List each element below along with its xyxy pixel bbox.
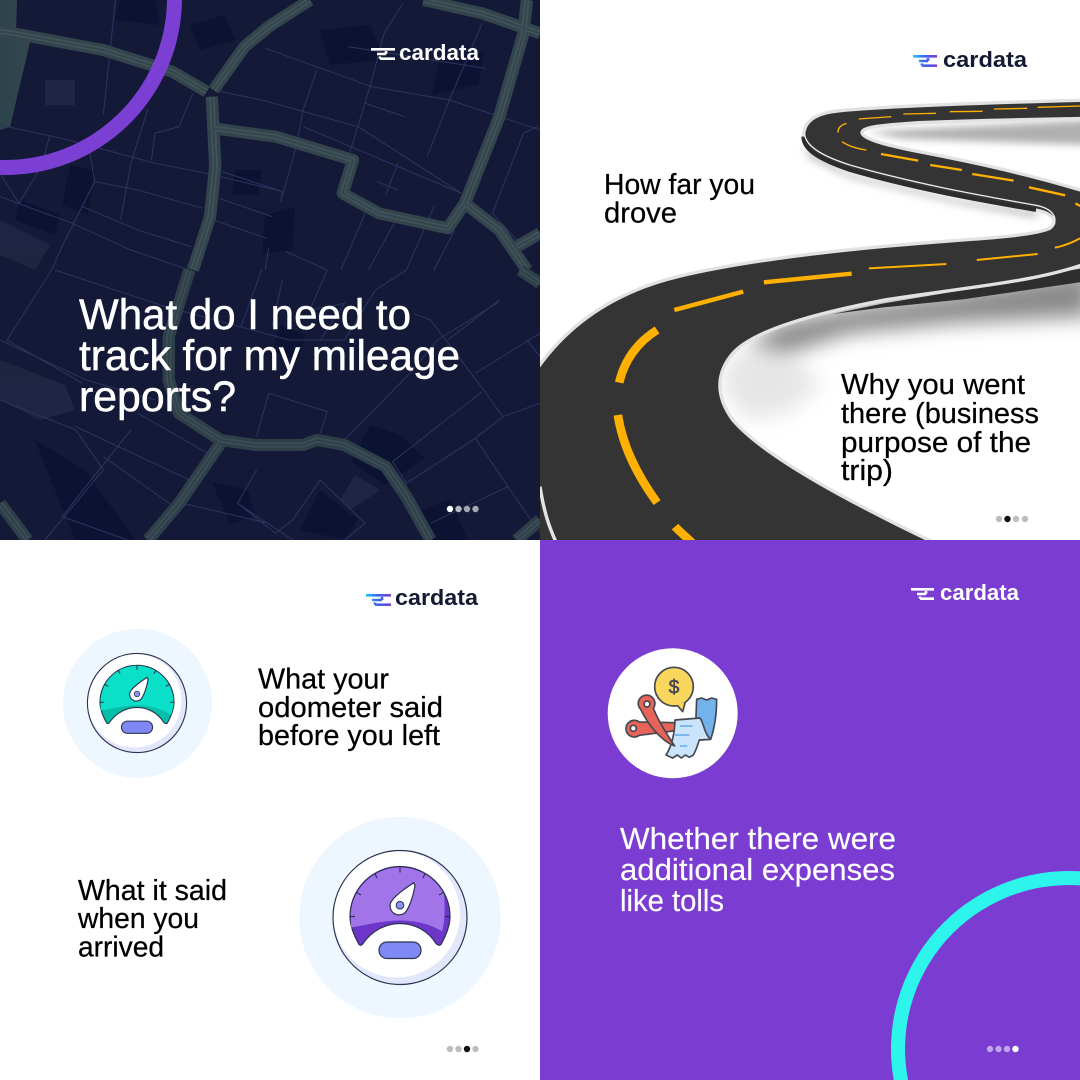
panel: odometer [0, 540, 540, 1080]
heading [79, 292, 460, 421]
heading: track for my mileage [79, 333, 460, 380]
text: what your odometer said: odometer said [258, 692, 443, 724]
text: what it said: when you [77, 903, 199, 935]
text: what your odometer said: before you left [258, 720, 440, 752]
pagination dots [987, 1046, 1019, 1052]
heading: What do I need to [79, 292, 411, 339]
text: how far: How far you [604, 169, 755, 201]
panel: additional expenses [540, 540, 1080, 1080]
heading: reports? [79, 374, 236, 421]
pagination dots [996, 516, 1028, 522]
logo: cardata [911, 584, 1020, 600]
logo: cardata [913, 51, 1028, 67]
text: why you went: trip) [841, 455, 893, 487]
text: what your odometer said: What your [258, 664, 390, 696]
text: how far [605, 172, 754, 223]
logo: cardata: cardata [399, 40, 480, 65]
pagination dots [447, 506, 479, 512]
text: what it said: arrived [78, 932, 164, 964]
panel: winding road [540, 51, 1080, 540]
icon: teal gauge [63, 629, 212, 778]
text: why you went: purpose of the [841, 427, 1031, 459]
text: why you went: Why you went [841, 369, 1025, 401]
text: what it said: What it said [78, 875, 227, 907]
pagination dots [447, 1046, 479, 1052]
text: how far: drove [604, 198, 677, 230]
icon: receipt and scissors: $ [669, 678, 680, 699]
text: why you went: there (business [841, 398, 1039, 430]
text: additional expenses: Whether there were [620, 821, 896, 856]
streets [0, 0, 540, 540]
text: what your odometer said [258, 664, 443, 752]
logo: cardata: cardata [940, 580, 1020, 605]
road illustration [530, 100, 1080, 557]
text: what it said [77, 875, 227, 964]
logo: cardata: cardata [395, 585, 479, 610]
map background [0, 0, 540, 540]
logo: cardata [366, 585, 479, 610]
text: additional expenses: like tolls [620, 883, 724, 918]
text: additional expenses [620, 826, 895, 912]
purple ring accent [0, 0, 182, 175]
logo: cardata: cardata [943, 47, 1028, 72]
icon: receipt and scissors [608, 648, 738, 778]
logo: cardata [371, 44, 480, 60]
icon: purple gauge [299, 817, 501, 1018]
text: why you went [841, 369, 1039, 487]
text: additional expenses: additional expenses [620, 852, 895, 887]
cyan ring accent [891, 871, 1080, 1080]
panel: dark map intro [0, 0, 540, 540]
